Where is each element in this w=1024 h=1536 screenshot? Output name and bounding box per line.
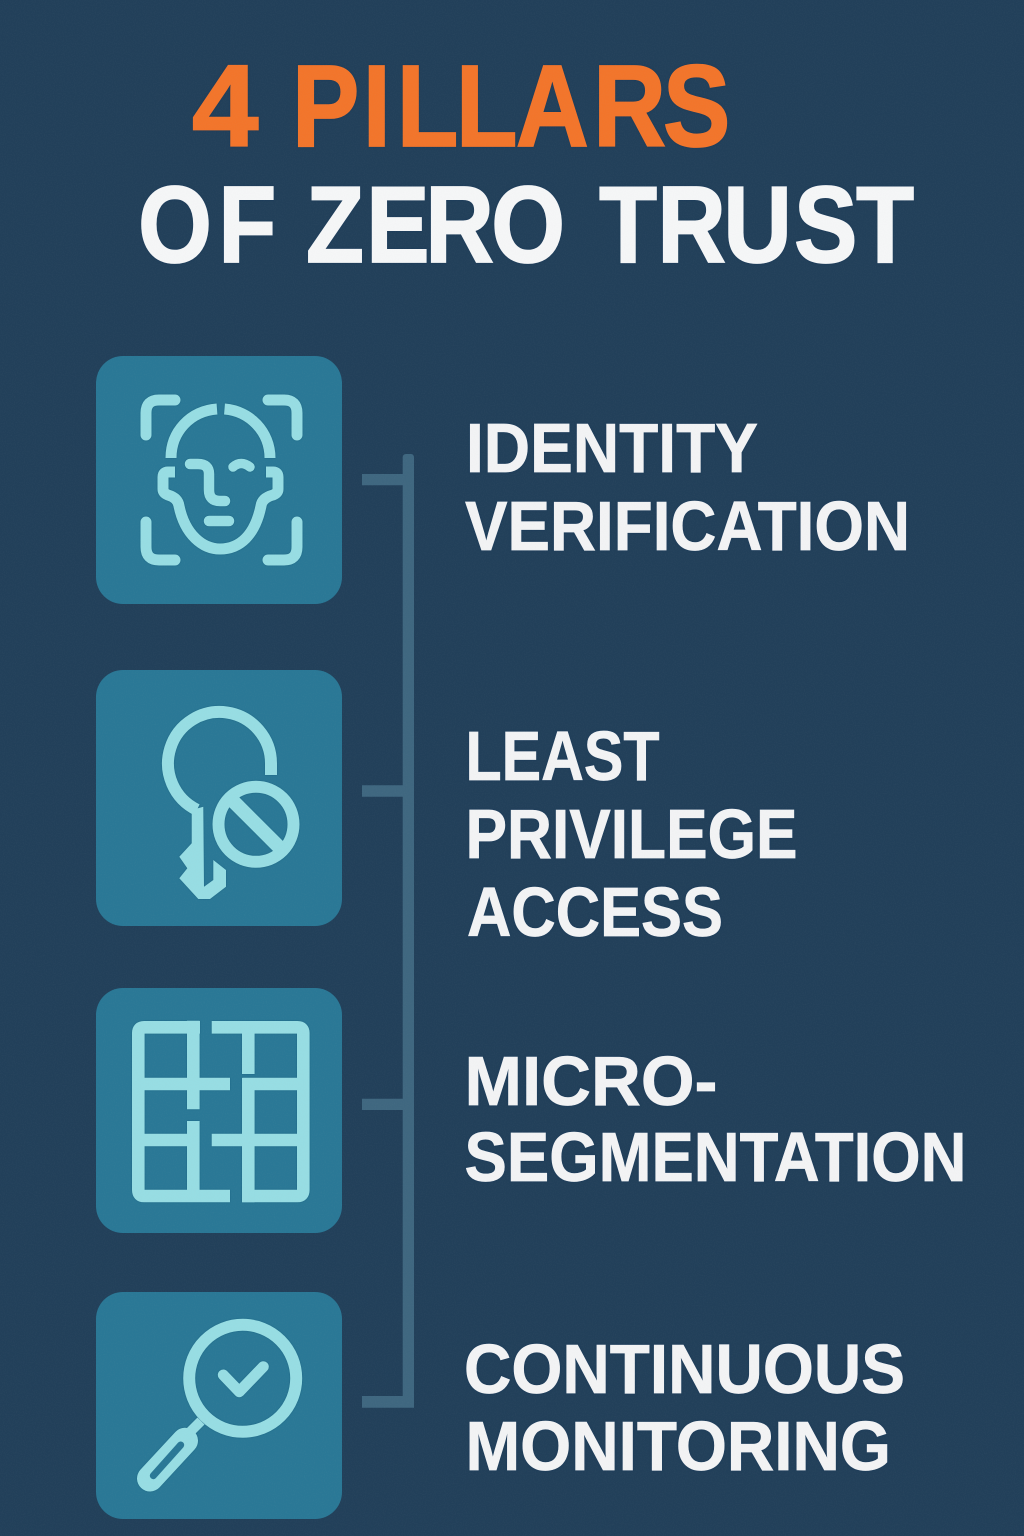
- label: continuous monitoring: CONTINUOUS: [464, 1330, 905, 1408]
- label: micro-segmentation: [464, 1042, 966, 1196]
- label: identity verification: IDENTITY: [466, 409, 758, 487]
- title line: pillars: PILLARS: [292, 43, 730, 172]
- label: continuous monitoring: [464, 1330, 905, 1485]
- panel: identity verification icon: [96, 356, 342, 604]
- label: least privilege access: ACCESS: [467, 873, 723, 951]
- title numeral: 4: 4: [192, 41, 258, 171]
- label: micro-segmentation: MICRO-: [464, 1042, 718, 1120]
- connector bracket: [362, 454, 414, 1408]
- label: identity verification: [465, 409, 910, 565]
- panel: continuous monitoring icon: [96, 1292, 342, 1519]
- label: least privilege access: PRIVILEGE: [466, 795, 798, 873]
- label: least privilege access: LEAST: [466, 717, 660, 795]
- title line: of zero trust: OF ZERO TRUST: [138, 164, 914, 285]
- label: identity verification: VERIFICATION: [465, 487, 910, 565]
- label: micro-segmentation: SEGMENTATION: [464, 1118, 966, 1196]
- icon: face scan: [146, 400, 297, 560]
- title: [138, 41, 914, 285]
- icon: key with prohibition sign: [168, 712, 294, 899]
- panel: least privilege icon: [96, 670, 342, 926]
- label: continuous monitoring: MONITORING: [466, 1407, 891, 1485]
- label: least privilege access: [466, 717, 798, 951]
- icon: segmented grid: [138, 1021, 303, 1202]
- icon: magnifier with check mark: [150, 1325, 296, 1478]
- panel: micro-segmentation icon: [96, 988, 342, 1233]
